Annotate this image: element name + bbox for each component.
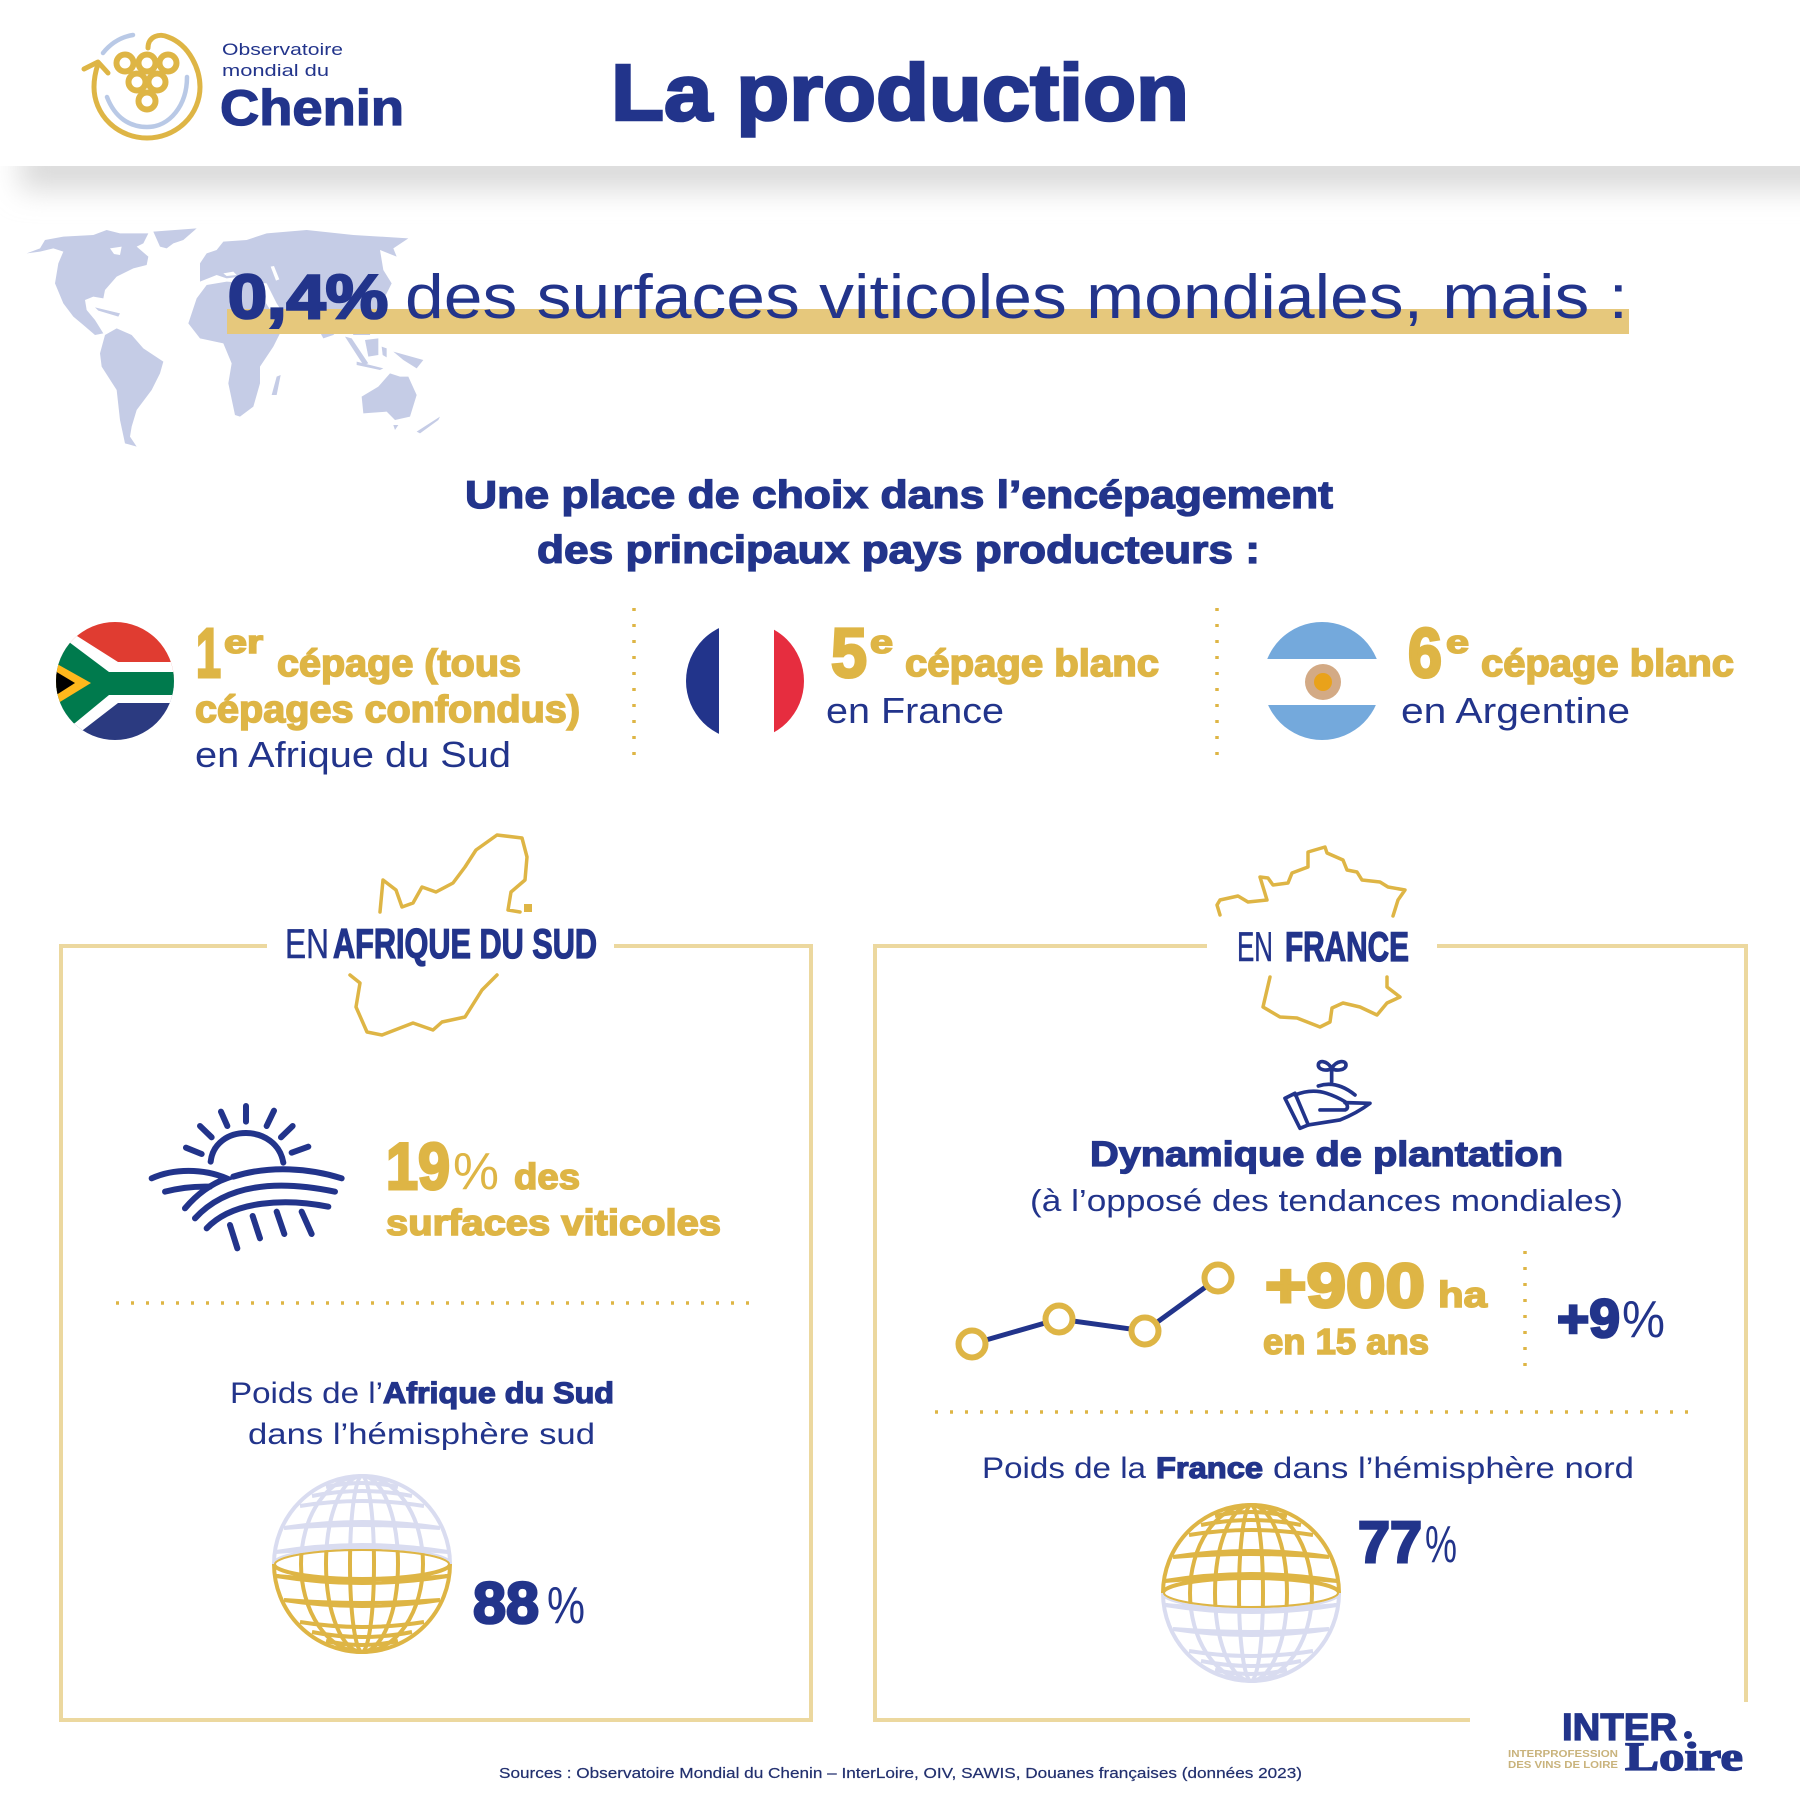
logo: InterLoire bbox=[1508, 1707, 1743, 1779]
panel heading: AFRIQUE DU SUD bbox=[333, 920, 597, 967]
text: 6e cépage blanc: cépage blanc bbox=[1481, 643, 1734, 685]
text: weight of France: Poids de la bbox=[982, 1452, 1146, 1485]
text: 5e cépage blanc: en France bbox=[826, 690, 1004, 731]
stat: 19%: 19 bbox=[386, 1129, 450, 1203]
icon: globe, south hemisphere highlighted bbox=[274, 1476, 450, 1652]
text: weight of South Africa: Poids de l’ bbox=[230, 1377, 383, 1410]
map outline: France bbox=[1217, 847, 1405, 1027]
logo: Observatoire mondial du Chenin bbox=[84, 35, 404, 138]
headline: 0,4% des surfaces viticoles mondiales: 0,4% bbox=[228, 263, 388, 332]
text: planting dynamics: Dynamique de plantation bbox=[1090, 1135, 1563, 1174]
text: weight of South Africa bbox=[230, 1377, 614, 1451]
stat: 88%: % bbox=[547, 1577, 585, 1635]
flag: Argentina bbox=[1263, 622, 1381, 741]
line chart bbox=[958, 1264, 1232, 1358]
text: weight of France bbox=[982, 1452, 1634, 1485]
stat: +9%: % bbox=[1622, 1291, 1665, 1349]
text: 5e cépage blanc: e bbox=[870, 624, 893, 660]
panel: En Afrique du Sud bbox=[61, 835, 811, 1720]
stat: 19%: des bbox=[514, 1156, 580, 1197]
logo icon: grape bunch in a ring bbox=[84, 35, 200, 138]
header background bbox=[0, 0, 1800, 166]
flag: France bbox=[686, 628, 804, 734]
text: weight of South Africa: dans l’hémisphère sud bbox=[248, 1418, 595, 1451]
text: 5e cépage blanc: 5 bbox=[831, 614, 867, 692]
logo text: Observatoire bbox=[222, 40, 343, 59]
text: 1er cépage: 1 bbox=[196, 614, 221, 692]
text: 6e cépage blanc: e bbox=[1446, 624, 1469, 660]
panel frame bbox=[875, 946, 1746, 1720]
text: planting dynamics bbox=[1030, 1135, 1623, 1218]
stat: 19%: % bbox=[453, 1143, 499, 1201]
panel heading bbox=[1237, 923, 1409, 970]
logo text bbox=[220, 40, 404, 136]
headline: 0,4% des surfaces viticoles mondiales: des surfaces viticoles mondiales, mais : bbox=[405, 263, 1628, 332]
stat: 88% bbox=[473, 1571, 585, 1636]
icon: sun over fields bbox=[152, 1106, 342, 1248]
text: planting dynamics: (à l’opposé des tendances mondiales) bbox=[1030, 1183, 1623, 1218]
header shadow bbox=[20, 146, 1800, 190]
subheading: Une place de choix dans l’encépagement bbox=[465, 474, 1333, 517]
panel heading: EN bbox=[285, 920, 329, 967]
icon: globe, north hemisphere highlighted bbox=[1163, 1505, 1339, 1681]
text: 1er cépage: er bbox=[224, 624, 263, 660]
panel heading: FRANCE bbox=[1285, 923, 1409, 970]
subheading bbox=[465, 474, 1333, 572]
stat: 77%: % bbox=[1425, 1516, 1457, 1574]
logo: InterLoire: INTERPROFESSION bbox=[1508, 1749, 1618, 1760]
panel heading bbox=[285, 920, 597, 967]
logo text: mondial du bbox=[222, 61, 329, 80]
stat: 88%: 88 bbox=[473, 1571, 539, 1636]
sources: Sources : Observatoire Mondial du Chenin – InterLoire, OIV, SAWIS, Douanes françaises (données 2023) bbox=[499, 1765, 1302, 1782]
stat: 19% bbox=[386, 1129, 721, 1243]
logo: InterLoire: INTER bbox=[1562, 1707, 1677, 1749]
panel: En France bbox=[875, 847, 1746, 1720]
text: 1er cépage: cépage (tous bbox=[277, 643, 521, 685]
text: 5e cépage blanc: cépage blanc bbox=[905, 643, 1159, 685]
world map bbox=[27, 228, 440, 447]
stat: +900 ha: en 15 ans bbox=[1263, 1321, 1429, 1362]
icon: hand holding a sprout bbox=[1285, 1062, 1370, 1128]
text: 6e cépage blanc: 6 bbox=[1408, 614, 1442, 692]
text: 6e cépage blanc: en Argentine bbox=[1401, 690, 1630, 731]
stat: +900 ha bbox=[1263, 1252, 1488, 1362]
logo: InterLoire: Loire bbox=[1625, 1734, 1743, 1779]
logo text: Chenin bbox=[220, 80, 404, 136]
text: 1er cépage: en Afrique du Sud bbox=[195, 734, 511, 775]
stat: 77%: 77 bbox=[1358, 1510, 1422, 1575]
title: La production bbox=[611, 48, 1189, 137]
stat: +900 ha: +900 bbox=[1265, 1252, 1425, 1321]
stat: +900 ha: ha bbox=[1438, 1274, 1488, 1315]
panel frame bbox=[61, 946, 811, 1720]
map outline: South Africa bbox=[350, 835, 532, 1035]
flag: South Africa bbox=[50, 622, 180, 741]
subheading: des principaux pays producteurs : bbox=[537, 529, 1260, 572]
text: weight of South Africa: Afrique du Sud bbox=[383, 1377, 614, 1410]
stat: +9%: +9 bbox=[1557, 1289, 1620, 1349]
text: weight of France: dans l’hémisphère nord bbox=[1273, 1452, 1634, 1485]
stat: +9% bbox=[1557, 1289, 1665, 1349]
logo: InterLoire: DES VINS DE LOIRE bbox=[1508, 1760, 1618, 1771]
stat: 19%: surfaces viticoles bbox=[386, 1202, 721, 1243]
highlight band bbox=[227, 309, 1629, 334]
text: 6e cépage blanc bbox=[1401, 614, 1734, 731]
text: 1er cépage bbox=[195, 614, 580, 775]
text: 1er cépage: cépages confondus) bbox=[195, 689, 580, 731]
panel heading: EN bbox=[1237, 923, 1273, 970]
text: 5e cépage blanc bbox=[826, 614, 1159, 731]
text: weight of France: France bbox=[1156, 1452, 1263, 1485]
stat: 77% bbox=[1358, 1510, 1457, 1575]
